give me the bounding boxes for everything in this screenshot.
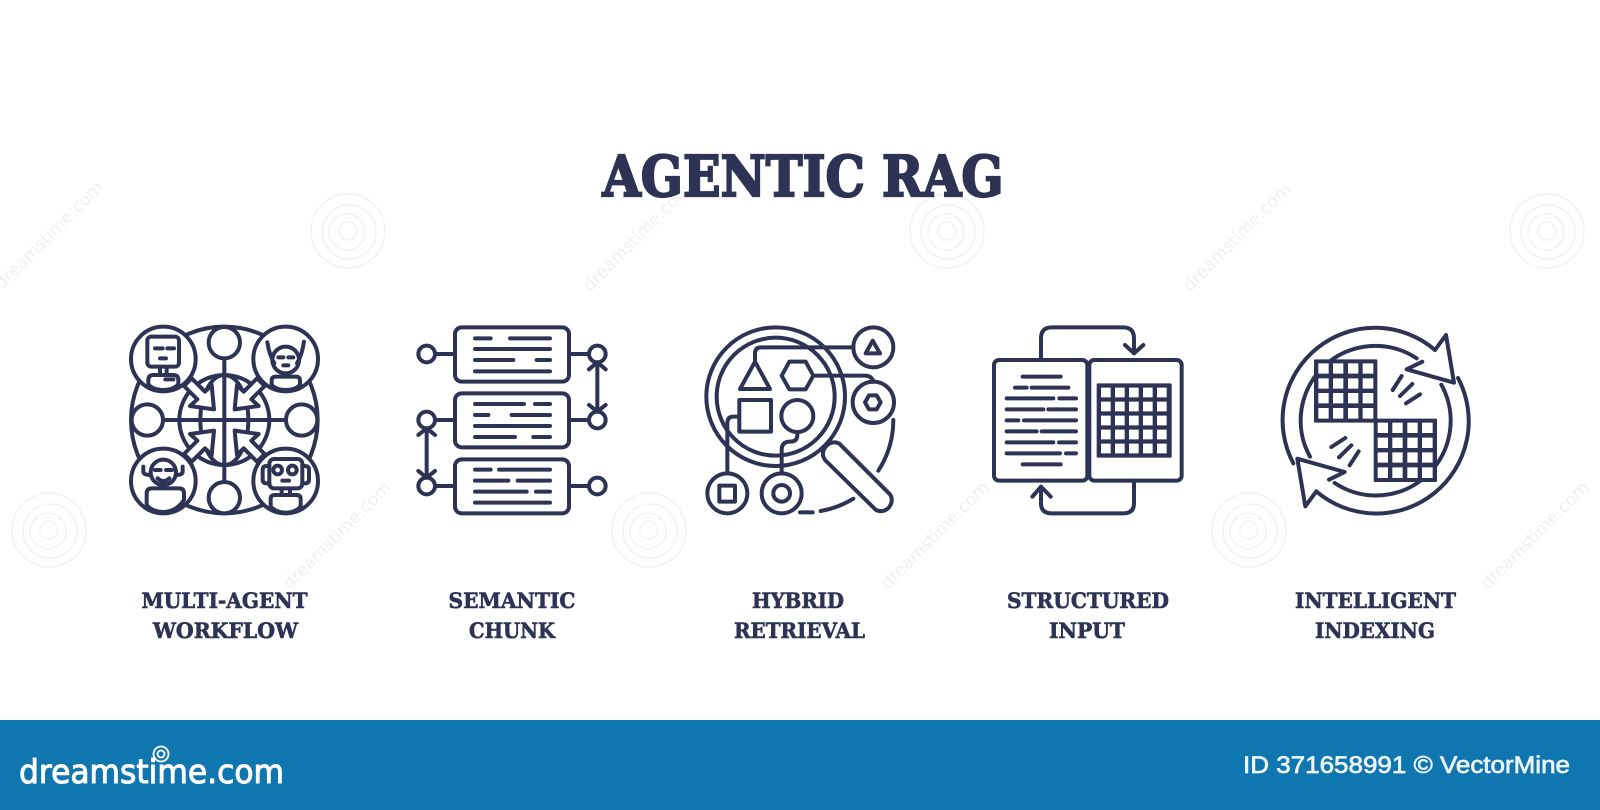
label: structured input: STRUCTURED (1007, 589, 1169, 614)
label: structured input: INPUT (1049, 619, 1125, 644)
logo wordmark: dreamstime.com (19, 752, 284, 791)
outer arc (800, 420, 893, 512)
grid top left (1314, 359, 1377, 423)
robot bottom right (253, 449, 318, 513)
globe hub (163, 358, 286, 482)
label: intelligent indexing: INDEXING (1315, 619, 1435, 644)
label: semantic chunk: SEMANTIC (448, 589, 576, 614)
watermark layer (0, 178, 1593, 594)
chunk box 1 (455, 327, 569, 382)
watermark layer: dreamstime.com (579, 180, 695, 296)
label: structured input (1007, 589, 1169, 644)
robot bottom left (131, 449, 196, 513)
label: hybrid retrieval (734, 589, 865, 644)
icon: multi-agent workflow (131, 327, 318, 513)
label: hybrid retrieval: RETRIEVAL (734, 619, 865, 644)
magnifier (706, 327, 892, 511)
node circles (707, 327, 894, 513)
loop arrows (1032, 327, 1143, 513)
link lines (727, 347, 873, 473)
watermark layer: dreamstime.com (1477, 478, 1593, 594)
connectors (418, 346, 606, 494)
icon: semantic chunk (418, 327, 606, 513)
icon: hybrid retrieval (706, 327, 894, 513)
label: semantic chunk: CHUNK (469, 619, 556, 644)
connector nodes (132, 327, 317, 513)
converging arrows (184, 378, 265, 462)
chunk box 3 (455, 459, 569, 513)
grid bottom right (1374, 419, 1437, 482)
logo spiral (154, 746, 168, 762)
label: multi-agent workflow (142, 589, 308, 644)
spark dashes (1331, 376, 1420, 465)
label: hybrid retrieval: HYBRID (752, 589, 844, 614)
label: intelligent indexing: INTELLIGENT (1295, 589, 1456, 614)
table page (1089, 360, 1182, 481)
shapes in lens (739, 362, 813, 432)
label: multi-agent workflow: MULTI-AGENT (142, 589, 308, 614)
robot top right (253, 327, 318, 391)
image id and credit: ID 371658991 © VectorMine (1243, 752, 1570, 779)
title: AGENTIC RAG (602, 144, 1004, 210)
icon: structured input (994, 327, 1182, 513)
cycle arrow bottom (1297, 378, 1469, 514)
watermark layer: dreamstime.com (877, 478, 993, 594)
cycle arrow top (1283, 328, 1454, 463)
document page (994, 360, 1087, 481)
robot top left (131, 327, 196, 391)
watermark layer: dreamstime.com (279, 478, 395, 594)
watermark layer: dreamstime.com (1179, 180, 1295, 296)
icon: intelligent indexing (1283, 328, 1469, 514)
label: intelligent indexing (1295, 589, 1456, 644)
label: multi-agent workflow: WORKFLOW (152, 619, 299, 644)
footer banner (0, 720, 1600, 810)
chunk box 2 (455, 393, 569, 447)
label: semantic chunk (448, 589, 576, 644)
